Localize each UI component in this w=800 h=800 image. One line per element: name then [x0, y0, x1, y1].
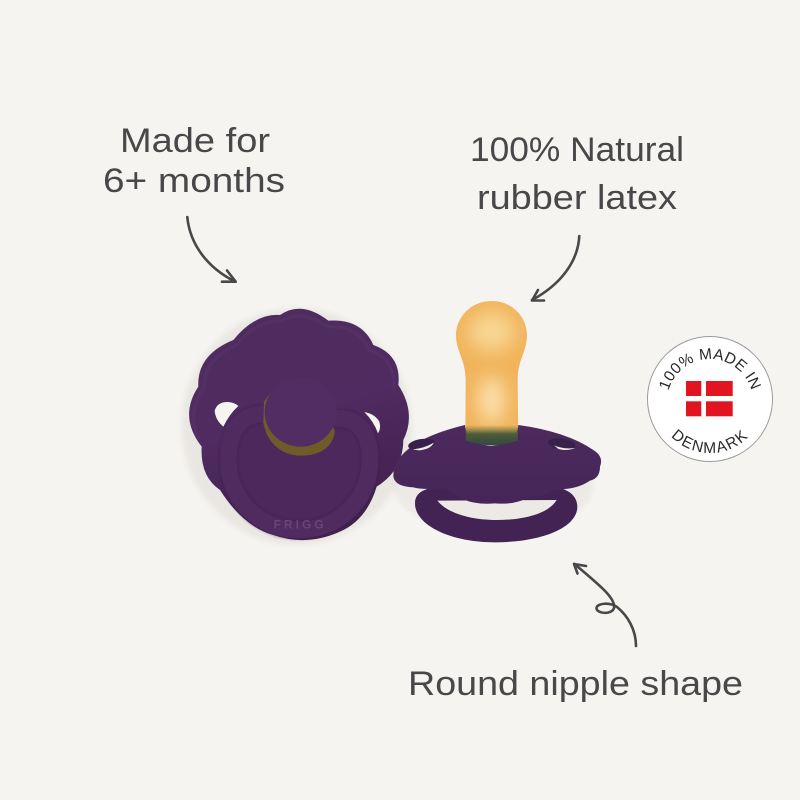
shield rim highlight	[193, 316, 394, 440]
gold nipple base	[263, 393, 335, 456]
badge disc	[648, 336, 772, 462]
label: made for 6+ months: 6+ months	[103, 162, 285, 200]
pacifier shadow	[182, 308, 412, 545]
label: made for 6+ months: Made for	[120, 122, 270, 160]
lower handle ring	[415, 487, 577, 542]
ring inner disc	[228, 415, 370, 530]
vent left	[407, 437, 436, 452]
label: round nipple shape: Round nipple shape	[408, 665, 743, 703]
rubber nipple	[456, 301, 527, 434]
Danish flag	[686, 381, 733, 416]
vent right	[547, 437, 576, 451]
pacifier: side view	[393, 298, 601, 542]
badge bottom text: DENMARK	[672, 429, 748, 453]
ventilation hole left	[215, 402, 238, 427]
shield side profile	[393, 425, 601, 504]
handle ring	[228, 414, 370, 530]
label: made for 6+ months	[103, 122, 285, 200]
arrow: looped to nipple shape	[574, 564, 636, 646]
badge: 100% made in Denmark	[647, 336, 773, 462]
pacifier: front view	[182, 308, 412, 545]
nipple base tint	[465, 425, 518, 445]
label: natural rubber latex: rubber latex	[477, 179, 677, 217]
ring brand mark: FRIGG	[274, 518, 324, 532]
label: natural rubber latex	[470, 131, 684, 217]
handle ring shading	[228, 414, 370, 530]
centre button	[265, 377, 337, 447]
label: natural rubber latex: 100% Natural	[470, 131, 684, 169]
flower shield	[189, 309, 409, 540]
badge arc paths	[667, 359, 753, 402]
arrow: to front of pacifier	[187, 217, 236, 282]
badge top text: 100% MADE IN	[660, 348, 761, 390]
ventilation hole right	[364, 412, 380, 433]
side shadow	[393, 440, 593, 533]
arrow: to nipple	[532, 236, 579, 300]
